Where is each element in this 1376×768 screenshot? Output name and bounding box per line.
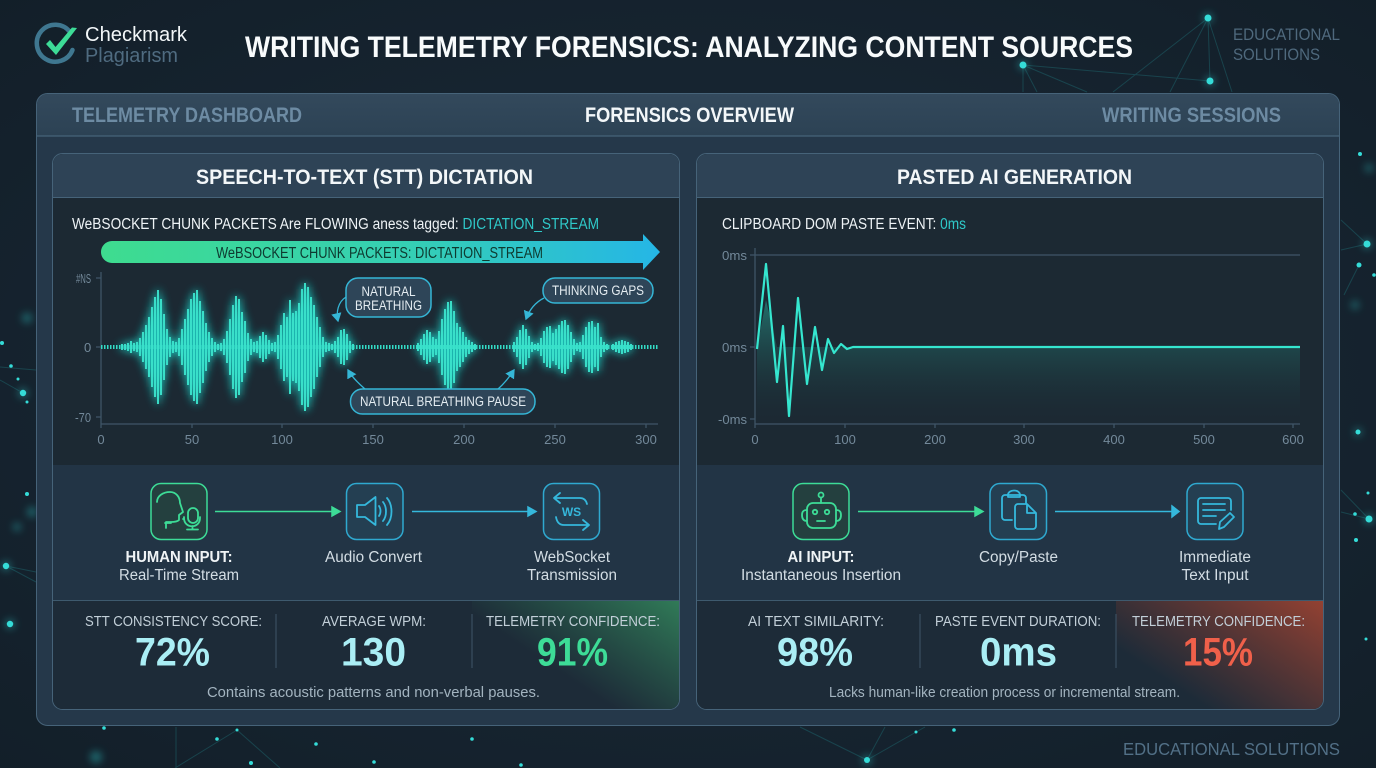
icon: check circle <box>37 25 77 62</box>
waveform trace <box>101 283 658 411</box>
navigation bar: FORENSICS OVERVIEW <box>585 104 794 127</box>
footer label: EDUCATIONAL SOLUTIONS <box>1123 739 1340 759</box>
heading: STT dictation: SPEECH-TO-TEXT (STT) DICTATION <box>196 166 533 189</box>
chart axes: #NS <box>76 271 91 286</box>
logo wordmark: Checkmark <box>85 24 188 46</box>
chart: audio waveform <box>75 271 658 447</box>
step label: human input: HUMAN INPUT: <box>126 549 232 566</box>
stat: telemetry confidence: TELEMETRY CONFIDENCE: <box>1132 614 1305 630</box>
arrow: AI input to copy paste <box>858 507 983 516</box>
arrow: packet stream: WeBSOCKET CHUNK PACKETS: DICTATION_STREAM <box>216 245 543 262</box>
chart axes: 400 <box>1103 432 1125 447</box>
top right label: EDUCATIONAL <box>1233 25 1340 44</box>
stat: telemetry confidence <box>486 614 660 674</box>
icon: websocket: WS <box>562 505 581 519</box>
logo: Checkmark Plagiarism <box>37 24 188 67</box>
chart axes: 0ms <box>722 248 748 263</box>
step label: AI input: Instantaneous Insertion <box>741 567 901 584</box>
chart axes: 100 <box>271 432 293 447</box>
chart axes: 100 <box>834 432 856 447</box>
step label: websocket transmission <box>527 549 617 584</box>
stats band background <box>697 600 1323 709</box>
chart axes: 0 <box>97 432 105 447</box>
flow band background <box>53 465 679 600</box>
stat: AI similarity <box>748 614 884 674</box>
chart axes: 0 <box>84 340 91 355</box>
navigation bar: TELEMETRY DASHBOARD <box>72 104 302 127</box>
stat: average wpm <box>322 614 426 674</box>
callout: natural breathing: NATURAL <box>362 284 416 299</box>
chart axes: -0ms <box>718 412 747 427</box>
callout: natural breathing: BREATHING <box>355 298 422 313</box>
stat: telemetry confidence: 91% <box>537 630 608 674</box>
stream description: WeBSOCKET CHUNK PACKETS Are FLOWING aness tagged: DICTATION_STREAM <box>72 216 599 233</box>
step label: websocket transmission: WebSocket <box>534 549 611 566</box>
step label: immediate text input: Text Input <box>1182 567 1249 584</box>
flow band background <box>697 465 1323 600</box>
arrow: audio to websocket <box>412 507 536 516</box>
stat: paste duration <box>935 614 1101 674</box>
navigation bar <box>37 94 1339 136</box>
chart axes: 0 <box>751 432 759 447</box>
chart: paste event signal <box>718 248 1304 447</box>
icon: speaker <box>346 484 403 540</box>
panel: speech-to-text dictation <box>52 154 1340 759</box>
logo wordmark <box>85 24 188 67</box>
chart axes: 50 <box>185 432 199 447</box>
caption: Lacks human-like creation process or incremental stream. <box>829 685 1180 701</box>
chart axes: 300 <box>635 432 657 447</box>
stat: AI similarity: 98% <box>777 630 853 674</box>
chart axes: 200 <box>924 432 946 447</box>
callout: natural breathing pause <box>348 370 535 414</box>
step label: copy paste: Copy/Paste <box>979 549 1058 566</box>
stat: AI similarity: AI TEXT SIMILARITY: <box>748 614 884 630</box>
chart axes: 300 <box>1013 432 1035 447</box>
heading: STT dictation <box>53 154 679 198</box>
stats band background <box>53 600 679 709</box>
icon: clipboard and page <box>990 484 1046 540</box>
caption: Contains acoustic patterns and non-verbal pauses. <box>207 685 540 701</box>
step label: human input <box>119 549 239 584</box>
callout: natural breathing pause: NATURAL BREATHING PAUSE <box>360 394 526 409</box>
step label: human input: Real-Time Stream <box>119 567 239 584</box>
confidence highlight red <box>1116 601 1323 709</box>
heading: pasted AI generation: PASTED AI GENERATION <box>897 166 1132 189</box>
stat: average wpm: 130 <box>341 630 406 674</box>
stat: average wpm: AVERAGE WPM: <box>322 614 426 630</box>
chart axes <box>718 248 1304 447</box>
chart axes: 500 <box>1193 432 1215 447</box>
heading: pasted AI generation <box>697 154 1323 198</box>
signal line <box>757 264 1300 416</box>
stat: consistency score: STT CONSISTENCY SCORE: <box>85 614 262 630</box>
stat: consistency score: 72% <box>135 630 210 674</box>
chart axes: 250 <box>544 432 566 447</box>
navigation bar: WRITING SESSIONS <box>1102 104 1281 127</box>
step label: immediate text input: Immediate <box>1179 549 1251 566</box>
top right label <box>1233 25 1340 64</box>
callout: thinking gaps: THINKING GAPS <box>552 283 644 298</box>
process flow: AI input <box>697 484 1323 709</box>
callout: natural breathing <box>337 278 431 321</box>
title: WRITING TELEMETRY FORENSICS: ANALYZING CONTENT SOURCES <box>245 31 1133 64</box>
logo wordmark: Plagiarism <box>85 45 178 67</box>
chart axes: 0ms <box>722 340 748 355</box>
arrow: packet stream <box>101 234 660 270</box>
chart axes: 600 <box>1282 432 1304 447</box>
step label: AI input: AI INPUT: <box>788 549 854 566</box>
confidence highlight green <box>472 601 679 709</box>
step label: websocket transmission: Transmission <box>527 567 617 584</box>
chart axes: -70 <box>75 410 91 425</box>
chart axes <box>75 271 658 447</box>
icon: document and pencil <box>1187 484 1243 540</box>
panel: dashboard container <box>36 94 1340 726</box>
step label: AI input <box>741 549 901 584</box>
stat: consistency score <box>85 614 262 674</box>
chart axes: 200 <box>453 432 475 447</box>
stat: telemetry confidence <box>1132 614 1305 674</box>
icon: robot <box>793 484 849 540</box>
stat: paste duration: PASTE EVENT DURATION: <box>935 614 1101 630</box>
stat: paste duration: 0ms <box>980 630 1057 674</box>
icon: speaking head and microphone <box>151 484 207 540</box>
stat: telemetry confidence: TELEMETRY CONFIDENCE: <box>486 614 660 630</box>
top right label: SOLUTIONS <box>1233 45 1320 64</box>
arrow: human input to audio <box>215 507 340 516</box>
icon: websocket <box>544 484 600 540</box>
panel: pasted AI generation <box>696 154 1340 759</box>
step label: immediate text input <box>1179 549 1251 584</box>
callout: thinking gaps <box>526 278 653 319</box>
stat: telemetry confidence: 15% <box>1183 630 1253 674</box>
step label: audio convert: Audio Convert <box>325 549 423 566</box>
area fill <box>757 300 1300 420</box>
process flow: human input <box>53 484 679 709</box>
chart axes: 150 <box>362 432 384 447</box>
paste event description: CLIPBOARD DOM PASTE EVENT: 0ms <box>722 216 966 233</box>
arrow: copy paste to text input <box>1055 506 1179 517</box>
